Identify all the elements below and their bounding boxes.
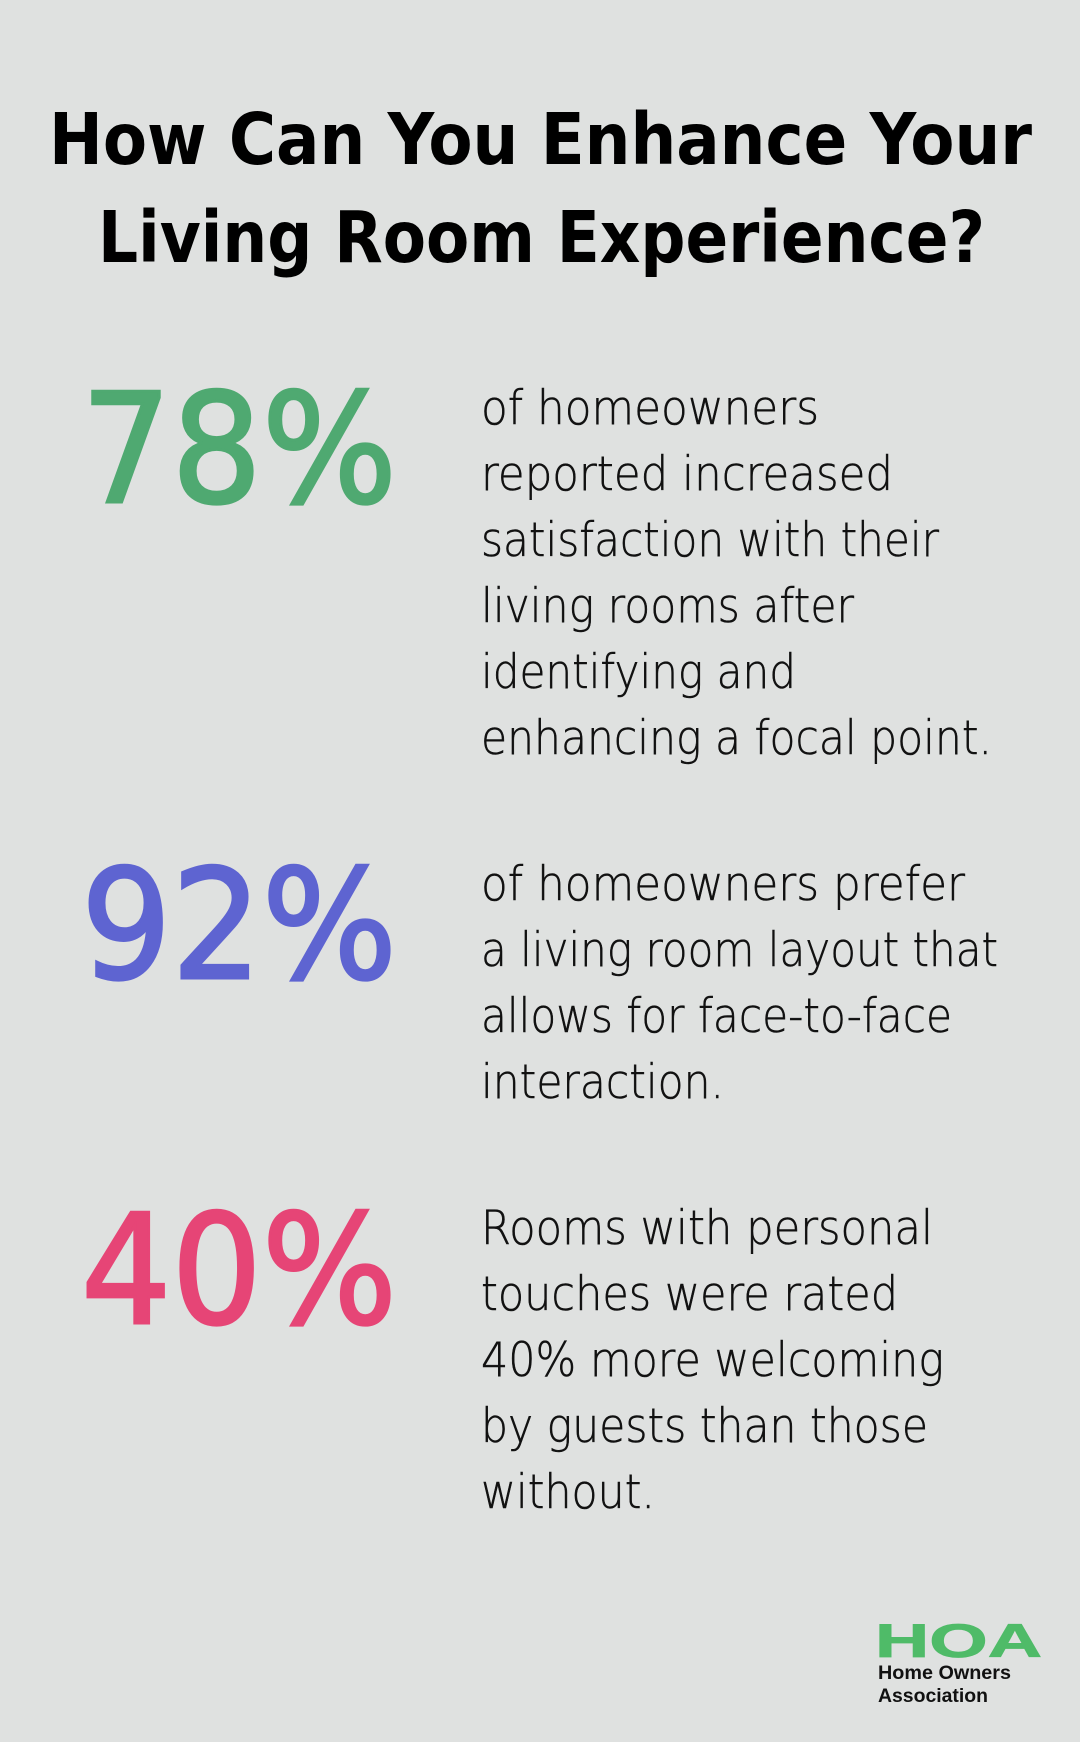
- logo: Home Owners Association: Association: [878, 1686, 988, 1707]
- text block: face-to-face layout: allows for face-to-face: [481, 989, 952, 1044]
- text block: focal point satisfaction: [481, 381, 992, 766]
- text block: focal point satisfaction: living rooms after: [481, 579, 855, 634]
- logo: Home Owners Association: Home Owners: [878, 1663, 1011, 1684]
- text block: focal point satisfaction: reported increased: [481, 447, 893, 502]
- title: Living Room Experience?: [98, 196, 985, 279]
- text block: face-to-face layout: a living room layout that: [481, 923, 998, 978]
- big number: 92%: 92%: [81, 837, 397, 1014]
- text block: face-to-face layout: [481, 857, 998, 1110]
- logo: Home Owners Association: [875, 1614, 1042, 1707]
- text block: face-to-face layout: interaction.: [481, 1055, 724, 1110]
- big number: 40%: 40%: [81, 1182, 397, 1359]
- text block: focal point satisfaction: identifying and: [481, 645, 796, 700]
- text block: personal touches: by guests than those: [481, 1399, 928, 1454]
- panel: stat 78 percent: [81, 361, 992, 766]
- text block: personal touches: touches were rated: [481, 1267, 898, 1322]
- text block: personal touches: Rooms with personal: [481, 1201, 933, 1256]
- text block: focal point satisfaction: of homeowners: [481, 381, 819, 436]
- text block: face-to-face layout: of homeowners prefer: [481, 857, 966, 912]
- text block: focal point satisfaction: enhancing a focal point.: [481, 711, 992, 766]
- text block: personal touches: 40% more welcoming: [481, 1333, 944, 1388]
- logo: Home Owners Association: HOA: [875, 1614, 1042, 1667]
- text block: personal touches: [481, 1201, 944, 1520]
- title: [49, 98, 1032, 279]
- big number: 78%: 78%: [81, 361, 397, 538]
- panel: stat 92 percent: [81, 837, 998, 1110]
- text block: focal point satisfaction: satisfaction with their: [481, 513, 940, 568]
- text block: personal touches: without.: [481, 1465, 655, 1520]
- panel: stat 40 percent: [81, 1182, 944, 1520]
